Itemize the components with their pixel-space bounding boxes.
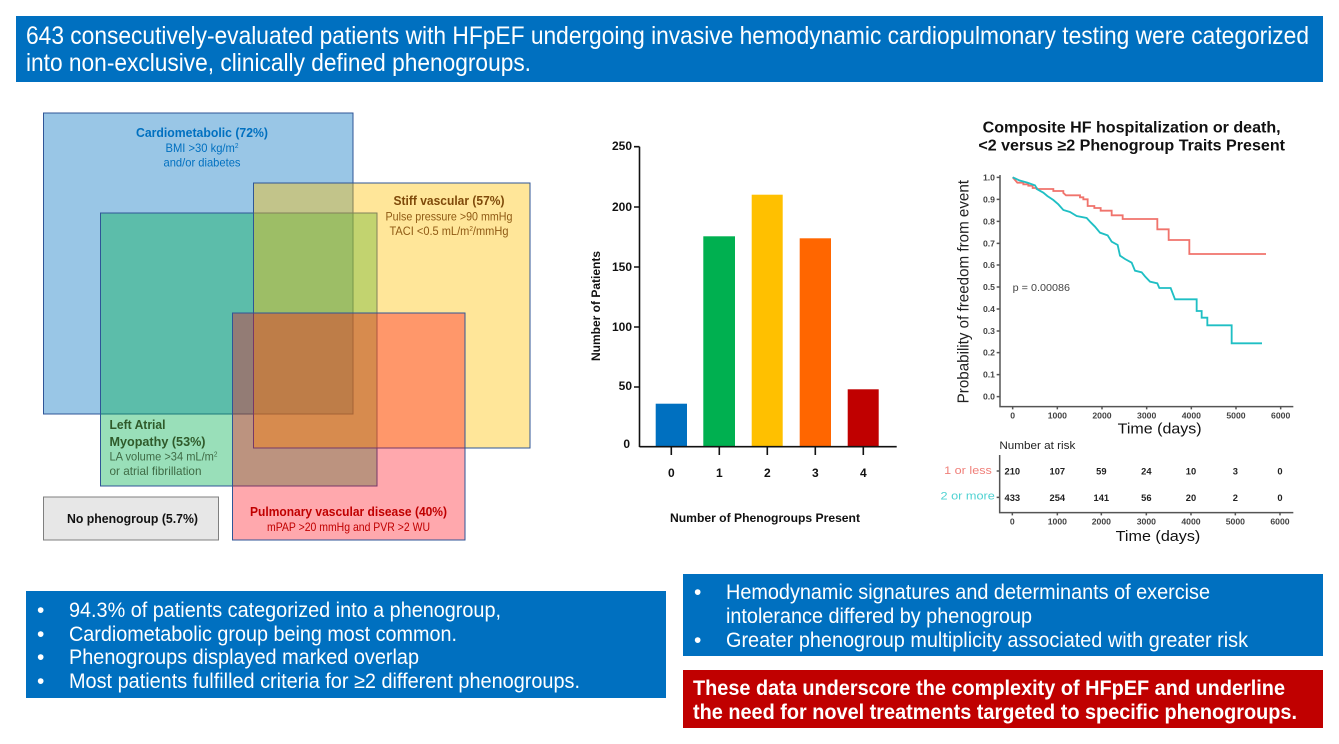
row: 1 or less: 3: [1233, 467, 1238, 477]
panel: cardiometabolic: Cardiometabolic (72%): [136, 125, 268, 140]
curve: 1 or less: [1013, 177, 1266, 254]
panel: cardiometabolic: 2: [235, 143, 239, 150]
y axis title: Probability of freedom from event: [955, 179, 972, 403]
row: 2 or more: 2: [1233, 493, 1238, 503]
p value: p = 0.00086: [1013, 283, 1070, 294]
axis tick labels: 3: [812, 466, 819, 480]
tick labels: 0.5: [983, 282, 995, 292]
header banner: into non-exclusive, clinically defined phenogroups.: [26, 49, 531, 77]
panel: cardiometabolic: BMI >30 kg/m: [166, 141, 240, 155]
axis tick labels: 0: [668, 466, 675, 480]
tick labels: 1.0: [983, 172, 995, 182]
header banner: [16, 16, 1323, 82]
tick labels: [983, 172, 1290, 421]
text block: phenogroup findings: Most patients fulfilled criteria for ≥2 different phenogroups.: [69, 670, 580, 693]
conclusion callout: the need for novel treatments targeted to specific phenogroups.: [693, 701, 1297, 724]
text block: phenogroup findings: •: [37, 670, 44, 693]
axis tick labels: 50: [619, 379, 632, 393]
row: 1 or less: 24: [1141, 467, 1152, 477]
axis tick labels: 100: [612, 320, 632, 334]
chart title: [978, 120, 1285, 155]
panel: cardiometabolic: and/or diabetes: [164, 156, 240, 170]
tick labels: [1010, 516, 1290, 526]
axis tick labels: 0: [623, 437, 630, 451]
row: 2 or more: 141: [1094, 493, 1109, 503]
row: 2 or more: 0: [1277, 493, 1283, 503]
text block: hemodynamics and risk: •: [694, 581, 701, 604]
row: 1 or less: 0: [1277, 467, 1283, 477]
panel: stiff vascular: Stiff vascular (57%): [394, 193, 504, 208]
text block: hemodynamics and risk: Hemodynamic signatures and determinants of exercise: [726, 581, 1210, 604]
row: 1 or less: 10: [1186, 467, 1196, 477]
text block: phenogroup findings: Cardiometabolic group being most common.: [69, 623, 457, 646]
axis tick labels: 2: [764, 466, 771, 480]
panel: left atrial myopathy: 2: [214, 452, 218, 458]
table heading: Number at risk: [999, 440, 1076, 452]
axis tick labels: [612, 139, 867, 480]
table axes: [997, 455, 1293, 515]
venn diagram of phenogroups: [44, 113, 530, 540]
tick labels: 0.3: [983, 326, 995, 336]
text block: phenogroup findings: 94.3% of patients categorized into a phenogroup,: [69, 599, 501, 622]
text block: hemodynamics and risk: Greater phenogroup multiplicity associated with greater risk: [726, 629, 1248, 652]
axis title: y: Number of Patients: [591, 251, 603, 361]
row: 1 or less: 107: [1050, 467, 1065, 477]
text block: phenogroup findings: •: [37, 623, 44, 646]
panel: no phenogroup: No phenogroup (5.7%): [67, 511, 198, 526]
panel: left atrial myopathy: Myopathy (53%): [110, 434, 206, 449]
panel: stiff vascular: 2: [469, 226, 473, 233]
conclusion callout: [683, 670, 1323, 728]
upper time axis label: Time (days): [1118, 420, 1202, 437]
panel: stiff vascular: Pulse pressure >90 mmHg: [386, 210, 512, 224]
panel: stiff vascular: TACI <0.5 mL/m: [390, 224, 476, 238]
number at risk table: [940, 420, 1293, 545]
tick labels: 0.7: [983, 238, 995, 248]
tick labels: 2000: [1092, 516, 1111, 526]
row: 2 or more: 56: [1141, 493, 1152, 503]
tick labels: 4000: [1181, 516, 1201, 526]
text block: phenogroup findings: •: [37, 646, 44, 669]
panel: no phenogroup: [44, 497, 218, 540]
row: 1 or less: 59: [1096, 467, 1107, 477]
tick labels: 6000: [1270, 516, 1290, 526]
tick labels: 3000: [1137, 411, 1156, 421]
tick labels: 1000: [1048, 411, 1067, 421]
text block: hemodynamics and risk: •: [694, 629, 701, 652]
row: 2 or more: 433: [1005, 493, 1020, 503]
tick labels: 5000: [1226, 516, 1245, 526]
tick labels: 0.8: [983, 216, 995, 226]
panel: left atrial myopathy: Left Atrial: [110, 417, 166, 432]
text block: hemodynamics and risk: intolerance differed by phenogroup: [726, 605, 1032, 628]
row: 2 or more: 2 or more: [940, 491, 995, 503]
Kaplan-Meier chart: [955, 120, 1293, 421]
row: 2 or more: 254: [1050, 493, 1066, 503]
tick labels: 5000: [1226, 411, 1246, 421]
panel: stiff vascular: [254, 183, 530, 448]
row: 1 or less: [944, 465, 1283, 477]
text block: phenogroup findings: [26, 591, 666, 698]
axes: [997, 175, 1293, 409]
axis title: x: Number of Phenogroups Present: [670, 513, 860, 525]
tick labels: 0.9: [983, 194, 995, 204]
panel: stiff vascular: /mmHg: [473, 224, 508, 238]
bar chart: number of phenogroups present: [591, 139, 897, 525]
panel: cardiometabolic: [44, 113, 353, 414]
conclusion callout: These data underscore the complexity of HFpEF and underline: [693, 677, 1285, 700]
tick labels: 0.6: [983, 260, 995, 270]
tick labels: 0: [1010, 516, 1015, 526]
axis tick labels: 150: [612, 260, 632, 274]
axis tick labels: 4: [860, 466, 867, 480]
chart title: Composite HF hospitalization or death,: [983, 120, 1281, 137]
tick labels: 6000: [1271, 411, 1290, 421]
curve: 2 or more: [1013, 177, 1262, 343]
panel: left atrial myopathy: [100, 213, 377, 486]
tick labels: 0.4: [983, 304, 995, 314]
tick labels: 1000: [1048, 516, 1067, 526]
axis tick labels: 250: [612, 139, 632, 153]
row: 1 or less: 210: [1005, 467, 1020, 477]
lower time axis label: Time (days): [1116, 528, 1200, 545]
tick labels: 0.0: [983, 392, 995, 402]
panel: pulmonary vascular disease: Pulmonary vascular disease (40%): [250, 504, 447, 519]
panel: left atrial myopathy: LA volume >34 mL/m: [110, 450, 223, 464]
panel: pulmonary vascular disease: mPAP >20 mmHg and PVR >2 WU: [267, 520, 430, 534]
row: 2 or more: 20: [1186, 493, 1196, 503]
axes: [634, 147, 897, 455]
text block: hemodynamics and risk: [683, 574, 1323, 656]
tick labels: 3000: [1137, 516, 1156, 526]
tick labels: 2000: [1092, 411, 1112, 421]
text block: phenogroup findings: Phenogroups displayed marked overlap: [69, 646, 419, 669]
tick labels: 4000: [1182, 411, 1201, 421]
tick labels: 0: [1010, 411, 1015, 421]
row: 1 or less: 1 or less: [944, 465, 992, 477]
text block: phenogroup findings: •: [37, 599, 44, 622]
row: 2 or more: [940, 491, 1283, 503]
tick labels: 0.2: [983, 348, 995, 358]
axis tick labels: 1: [716, 466, 723, 480]
panel: pulmonary vascular disease: [232, 313, 465, 540]
axis tick labels: 200: [612, 200, 632, 214]
bars: [656, 195, 879, 447]
tick labels: 0.1: [983, 370, 995, 380]
panel: left atrial myopathy: or atrial fibrillation: [110, 464, 202, 478]
chart title: <2 versus ≥2 Phenogroup Traits Present: [978, 138, 1285, 155]
